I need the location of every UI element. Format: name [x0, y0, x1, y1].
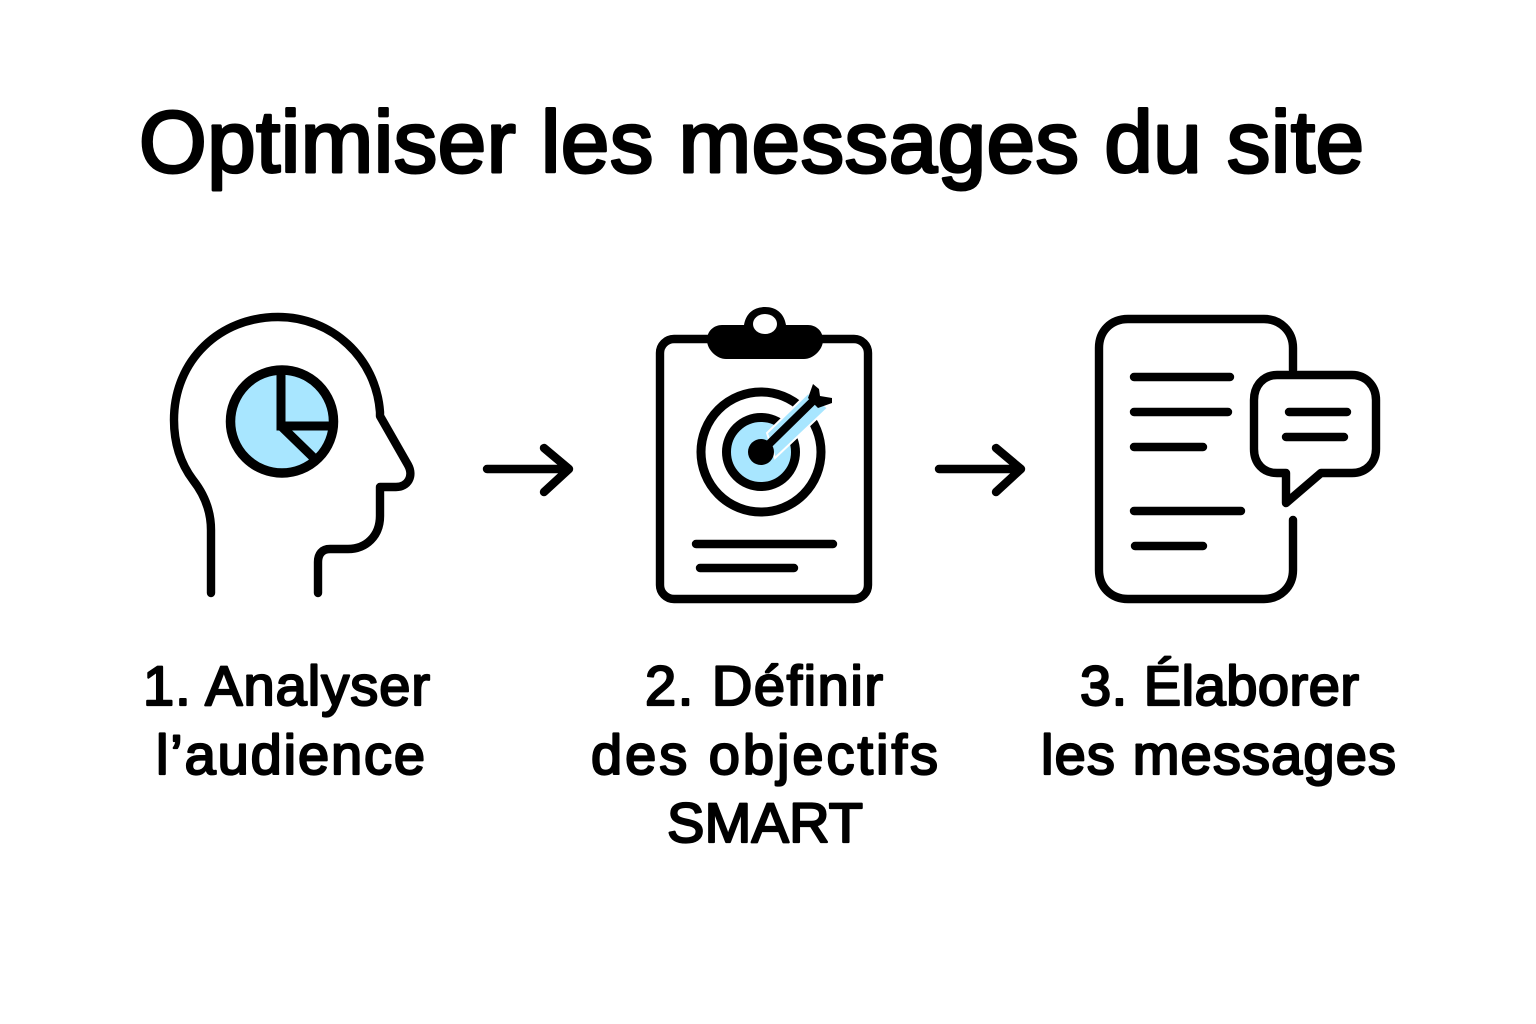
head outline	[174, 317, 410, 593]
clipboard clip	[707, 307, 823, 359]
label: step 2: SMART	[667, 791, 863, 854]
title: Optimiser les messages du site	[139, 94, 1364, 191]
icon: head with pie chart	[174, 317, 410, 593]
label: step 3: 3. Élaborer	[1080, 654, 1359, 717]
speech bubble	[1254, 375, 1376, 503]
clipboard text lines	[696, 544, 833, 568]
label: step 2	[591, 654, 938, 854]
label: step 2: 2. Définir	[645, 654, 883, 717]
pie chart	[230, 368, 334, 473]
target	[701, 384, 832, 512]
label: step 1	[143, 654, 430, 786]
label: step 1: 1. Analyser	[143, 654, 430, 717]
arrow in target	[761, 384, 832, 458]
clipboard board	[660, 339, 868, 599]
document outline	[1099, 319, 1293, 599]
label: step 2: des objectifs	[591, 723, 938, 786]
label: step 3: les messages	[1041, 723, 1396, 786]
label: step 1: l’audience	[156, 723, 425, 786]
icon: document with speech bubble	[1099, 319, 1376, 599]
label: step 3	[1041, 654, 1396, 786]
document text lines	[1134, 377, 1241, 546]
arrow 1	[487, 448, 569, 492]
arrow 2	[939, 448, 1021, 492]
icon: clipboard with target	[660, 307, 868, 599]
